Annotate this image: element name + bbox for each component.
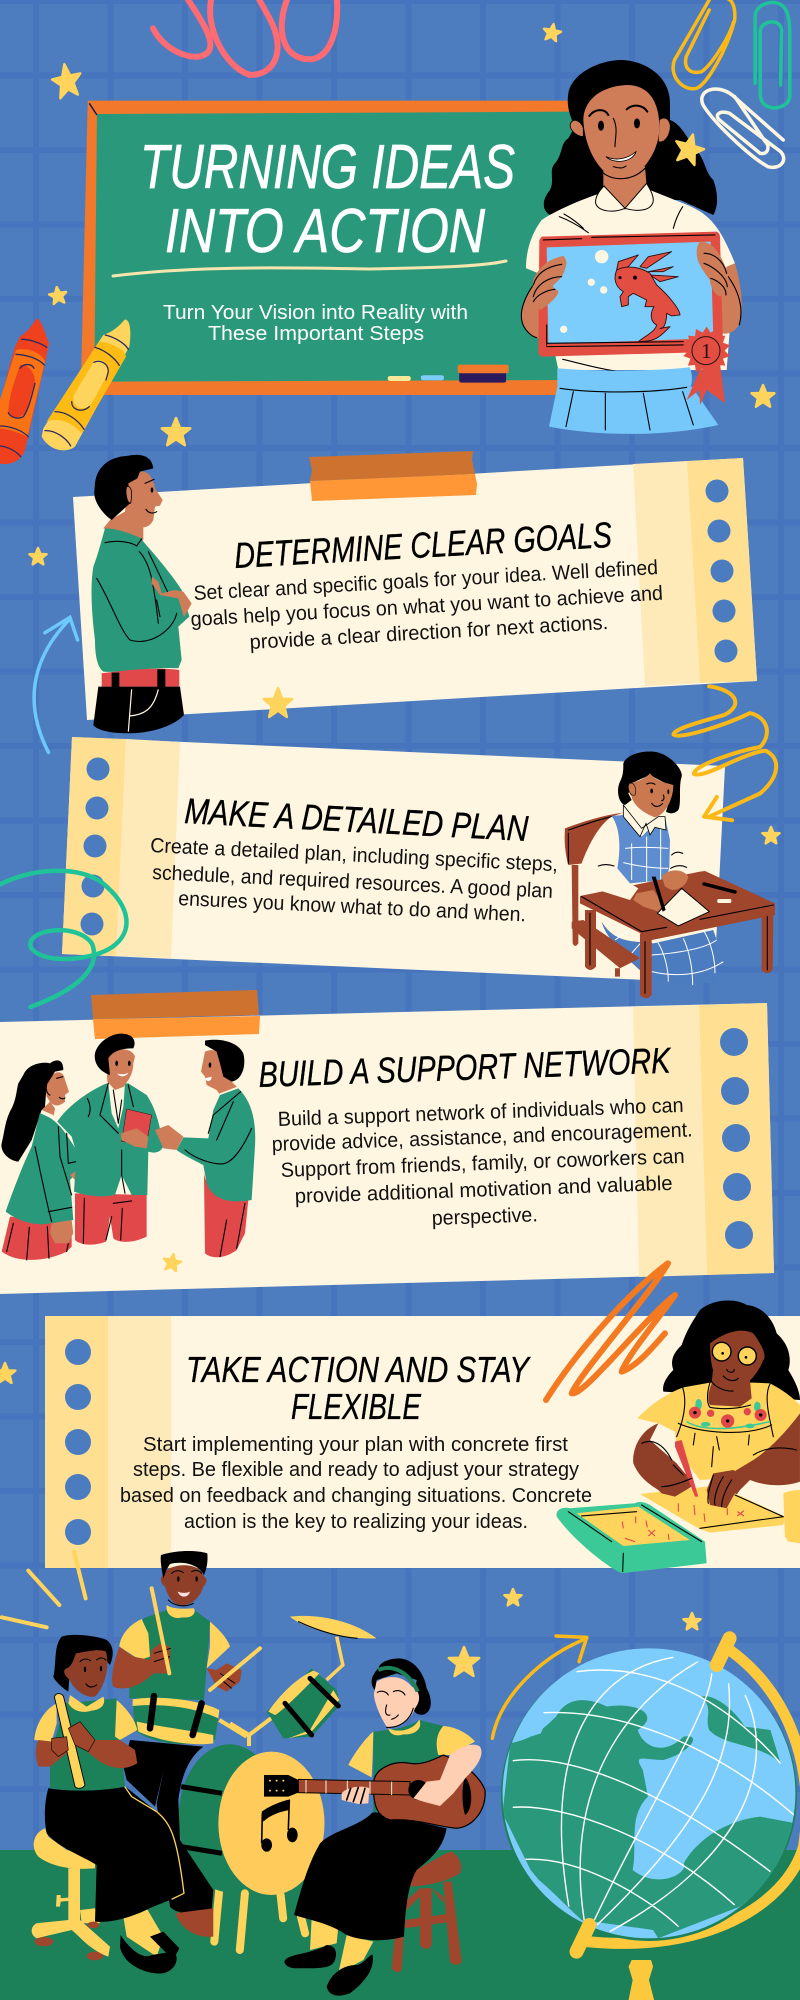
drum mount left [219,1720,247,1737]
woman jacket lines [35,1127,83,1222]
tom straps [285,1678,338,1735]
body text: Start implementing your plan with concrete first [143,1433,568,1456]
pinafore grid [623,827,668,882]
three colleagues talking [1,1034,255,1260]
right hand [662,870,688,890]
subtitle: Turn Your Vision into Reality with [163,301,468,324]
body text [120,1433,592,1533]
stool knob [56,1895,72,1907]
desk top [580,871,775,942]
flute player sleeves [34,1700,137,1742]
flute player arms [36,1722,137,1768]
ocean [501,1649,797,1941]
man middle trousers [75,1193,147,1245]
frame lines [543,235,715,347]
paper lines and marks [700,1495,783,1528]
rosette number: 1 [701,339,712,363]
ear [126,486,132,503]
woman neck and face [42,1072,69,1118]
face [710,1331,765,1392]
light strip [108,1316,171,1568]
left hand [655,1460,693,1497]
man middle lapels [87,1083,133,1193]
green scribble [0,871,126,1007]
shirt [526,190,735,370]
girl holding axolotl picture [521,60,742,434]
man with crossed arms [92,455,192,733]
body text: action is the key to realizing your ideas. [184,1510,528,1533]
man right head [201,1050,238,1095]
man middle trouser lines [83,1198,132,1243]
rosette ring [692,337,720,365]
heading: BUILD A SUPPORT NETWORK [258,1040,673,1095]
subtitle [163,301,468,345]
shoes [120,1932,179,1973]
belt [102,669,179,687]
body text: Create a detailed plan, including specific steps, [150,834,558,876]
woman hair [1,1060,63,1162]
arm lines [97,539,177,641]
woman jacket [6,1113,85,1224]
man middle hand [121,1128,148,1148]
tape [309,451,477,501]
arms [521,263,742,338]
man right jacket [177,1088,255,1201]
left hand [533,256,566,310]
flute player top [50,1698,125,1791]
title: TURNING IDEAS [140,133,515,202]
drummer and flute player [32,1551,260,1973]
drummer torso [129,1610,210,1700]
tray lines [568,1505,702,1572]
axolotl [615,252,680,342]
guitarist legs [310,1918,373,1973]
finger lines [662,1465,732,1507]
man middle jacket [57,1083,163,1196]
paperclips [673,0,790,167]
red marks in tray [622,1517,669,1542]
yellow strip [45,1316,108,1568]
punch holes [720,1028,753,1249]
bass drum legs [214,1888,305,1950]
legs [123,1908,163,1957]
yellow scribble arrow [673,686,776,820]
chair line [568,817,612,863]
punch holes [706,480,738,662]
eyes and mouth [712,1352,747,1391]
bass drum [179,1744,324,1895]
crayons [0,318,130,464]
cymbal [290,1616,377,1680]
red marks on paper [678,1503,744,1522]
heading [186,1349,531,1427]
face [583,85,659,180]
stool back [80,1908,100,1923]
tablet frame [538,232,723,357]
body text: based on feedback and changing situations. Concrete [120,1484,592,1507]
motion lines [598,852,687,868]
skirt waistband [557,367,692,388]
woman skirt [2,1217,72,1260]
stool feet [35,1922,103,1960]
man middle face [115,1061,131,1076]
left hand [633,890,663,912]
title [140,133,515,266]
guitarist collar [388,1719,420,1735]
body text: schedule, and required resources. A good plan [152,861,553,903]
guitarist face [377,1691,413,1727]
title: INTO ACTION [165,197,485,266]
student writing at desk [565,752,775,998]
body text: steps. Be flexible and ready to adjust your strategy [133,1458,580,1481]
finger lines [533,253,727,302]
ear [628,783,636,795]
body text: provide a clear direction for next actions. [249,611,609,654]
guitarist hair [372,1658,431,1715]
chalk underline [113,261,506,276]
side hole [462,1777,471,1815]
light strip [116,739,180,958]
paper [640,1487,785,1533]
floor [0,1850,800,2000]
red squiggle [153,0,337,75]
neck [708,1360,752,1407]
notebook [657,888,709,926]
pencil [675,1440,698,1497]
frets [306,1780,392,1795]
woman collar [41,1110,55,1120]
meridians [513,1657,796,1932]
stars bottom [449,1589,701,1676]
flute player face [64,1650,107,1697]
man right face [205,1062,212,1081]
hair [663,1300,800,1400]
stool seat [34,1828,95,1869]
guitar head [264,1775,298,1797]
trouser seams [128,689,158,732]
sleeve and shirt [579,817,638,900]
panel: determine clear goals [73,451,757,720]
man right hair [205,1040,244,1082]
guitarist shoes [284,1945,373,1996]
man right jacket lines [185,1092,252,1164]
orange scribble [546,1263,675,1400]
flute [54,1694,85,1788]
flute player hair [53,1635,113,1692]
desk legs [585,910,773,998]
arm outlines [521,277,741,338]
globe stand [587,1650,800,2000]
drummer arms [112,1643,242,1692]
guitarist [264,1658,485,1996]
body text: provide advice, assistance, and encouragement. [271,1118,693,1156]
snare drum [133,1696,219,1744]
tray inner [577,1507,690,1546]
right hand [707,1470,748,1508]
card paper [45,1316,800,1568]
skirt pleats [560,387,693,430]
arm lines [642,1441,797,1460]
guitarist sleeves [348,1726,475,1777]
ribbon tails [687,363,725,405]
yellow strip [687,458,757,683]
shirt folds [559,207,683,371]
skirt [549,387,718,434]
headband [378,1668,418,1692]
globe [501,1638,800,2000]
soundhole [408,1780,428,1800]
flute player collar [68,1695,104,1712]
drummer shoe [175,1908,213,1937]
hair [94,455,153,520]
yellow arrow to globe [492,1636,587,1738]
band illustration: drums [179,1616,377,1950]
neck [603,167,647,210]
desk edges [582,897,773,993]
drumsticks [152,1588,260,1690]
smile [606,152,636,161]
man right trouser lines [220,1203,245,1257]
tom mount [230,1717,273,1746]
guitar neck [298,1779,410,1795]
stars section 3 [0,1253,182,1383]
eyes and brows [589,106,647,179]
body text [150,834,558,926]
trousers [93,687,184,733]
woman hands [50,1163,103,1243]
panel: make a detailed plan [62,737,725,983]
drummer head [161,1565,207,1605]
tuner dots [269,1780,284,1792]
picture area [547,242,713,344]
skirt [45,1786,185,1922]
punch holes [65,1339,91,1545]
card paper [0,1003,774,1294]
chair back [565,813,623,865]
man right collar [218,1087,239,1097]
chair frame [572,865,640,977]
drummer collar [166,1605,195,1618]
guitarist top [373,1720,443,1813]
drummer trousers [123,1740,213,1913]
tom stripes [268,1671,339,1738]
drummer finger lines [154,1648,235,1688]
hair [618,752,682,813]
man middle neck and head [102,1049,135,1090]
body text [190,556,664,654]
man right trousers [204,1173,248,1257]
face details [647,783,669,806]
yellow strip [699,1003,774,1275]
tom drum and music note [230,1668,340,1852]
fret fingers [347,1787,365,1803]
right hand [697,242,728,297]
collar [596,183,653,211]
flute player features [80,1658,106,1687]
punch holes [80,758,110,936]
arms [633,1413,800,1508]
body text: Set clear and specific goals for your idea. Well defined [193,556,659,605]
woman marking papers [556,1300,800,1573]
blue arrow [34,617,78,752]
man middle hair [95,1034,135,1075]
pen on desk [704,884,735,892]
yellow crayon [42,319,130,450]
globe pivots [577,1638,730,1952]
left sleeve cuff [600,872,638,900]
face [629,773,673,817]
cup [783,1490,800,1543]
blouse [637,1383,800,1480]
heading: DETERMINE CLEAR GOALS [233,514,613,576]
guitarist skirt [294,1812,447,1940]
man right hand [155,1125,183,1150]
drummer hair [161,1551,208,1578]
plaid skirt [602,922,717,983]
hand [152,577,192,617]
blouse lines [677,1383,773,1467]
rosette [681,327,730,375]
man middle shirt [108,1083,125,1128]
music note [261,1799,298,1852]
drummer face [168,1570,202,1606]
card paper [73,458,757,720]
woman face details [46,1077,65,1099]
light strip [633,461,700,686]
hair [544,60,717,215]
skirt trim [124,1786,184,1899]
guitarist arm [413,1745,481,1806]
pen in hand [652,877,666,912]
guitar body [374,1755,485,1828]
face details [145,479,157,513]
card paper [62,737,725,983]
body text: provide additional motivation and valuable [294,1172,673,1208]
subtitle: These Important Steps [208,322,424,345]
drummer sleeves [119,1619,230,1668]
green tray [556,1502,707,1573]
guitarist head [374,1677,419,1727]
light strip [633,1005,707,1277]
yellow strip [62,737,126,956]
woman skirt pleats [7,1223,68,1260]
collar [623,805,666,837]
bubbles [560,250,608,333]
embroidery [687,1399,770,1429]
tape [91,990,260,1039]
heading: MAKE A DETAILED PLAN [184,790,530,849]
chalkboard [81,101,574,395]
continents [503,1696,796,1938]
stool post [32,1868,110,1957]
stars section 1 [29,548,292,717]
tom body [267,1668,340,1738]
face and neck [103,471,163,540]
stool top [407,1852,461,1887]
skirt lines [615,930,723,985]
ears [570,118,670,142]
tablet [122,1109,152,1143]
body text: Support from friends, family, or coworkers can [280,1145,685,1182]
panel: take action and stay flexible [45,1316,800,1568]
stars top section [48,23,774,445]
pinafore [612,815,670,883]
glasses [712,1342,756,1365]
eraser [717,899,731,903]
belt loops [112,669,165,688]
music rays [2,1552,86,1627]
red crayon [0,318,49,464]
stool legs [392,1882,462,1972]
guitarist fret hand [342,1787,369,1804]
flute player hand [52,1722,95,1757]
body text: perspective. [431,1203,538,1230]
panel: build a support network [0,990,774,1294]
heading: FLEXIBLE [291,1386,422,1427]
star section 2 [762,827,780,843]
body text: goals help you focus on what you want to achieve and [190,582,664,631]
heading: TAKE ACTION AND STAY [186,1349,531,1390]
body text: ensures you know what to do and when. [178,887,526,926]
body text: Build a support network of individuals who can [277,1094,684,1131]
shirt [92,528,189,672]
body text [271,1094,693,1230]
